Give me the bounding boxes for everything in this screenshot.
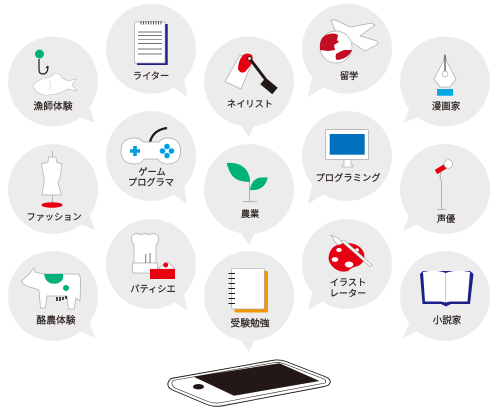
- label: 声優: [437, 213, 455, 224]
- panel: writer: [106, 4, 196, 97]
- icon: open book: [420, 271, 474, 306]
- panel: study abroad: [302, 4, 392, 97]
- panel: nail artist: [204, 36, 294, 137]
- panel: voice actor: [400, 144, 490, 234]
- panel: novelist: [400, 251, 490, 341]
- label: ファッション: [26, 212, 82, 222]
- icon: chef hat and cake: [131, 234, 175, 279]
- panel: game programmer: [106, 111, 196, 204]
- panel: fishing experience: [8, 36, 98, 126]
- panel: dairy farming: [8, 251, 98, 341]
- icon: nail and polish brush: [225, 54, 275, 91]
- panel: exam study: [204, 251, 294, 352]
- icon: pen nib: [434, 54, 456, 96]
- label: 漁師体験: [33, 100, 73, 112]
- panel: fashion: [8, 144, 98, 234]
- icon: cow: [22, 268, 81, 309]
- icon: microphone: [436, 160, 453, 209]
- label: イラスト: [330, 278, 366, 288]
- label: プログラマ: [128, 176, 174, 188]
- label: 農業: [241, 208, 259, 219]
- smartphone: [168, 360, 330, 406]
- icon: sprout: [227, 163, 268, 202]
- label: ライター: [133, 71, 169, 81]
- icon: plane and globe: [320, 20, 378, 63]
- label: ゲーム: [138, 166, 166, 177]
- panel: farming: [204, 144, 294, 245]
- label: レーター: [330, 288, 366, 298]
- label: 受験勉強: [230, 316, 270, 330]
- label: ネイリスト: [227, 99, 273, 109]
- label: プログラミング: [315, 172, 381, 183]
- icon: palette and brush: [329, 235, 372, 272]
- panel: programming: [302, 111, 392, 204]
- icon: monitor: [326, 130, 368, 167]
- label: 留学: [340, 70, 358, 81]
- icon: mannequin: [42, 151, 62, 208]
- icon: notebook: [228, 268, 268, 312]
- label: 小説家: [433, 314, 462, 326]
- panel: manga artist: [400, 36, 490, 126]
- panel: illustrator: [302, 219, 392, 310]
- label: 酪農体験: [36, 314, 76, 326]
- label: パティシエ: [130, 284, 176, 294]
- icon: hook and fish: [33, 50, 77, 95]
- icon: notepad: [134, 21, 168, 65]
- icon: game controller: [121, 128, 180, 164]
- panel: patissier: [106, 219, 196, 310]
- label: 漫画家: [432, 100, 461, 112]
